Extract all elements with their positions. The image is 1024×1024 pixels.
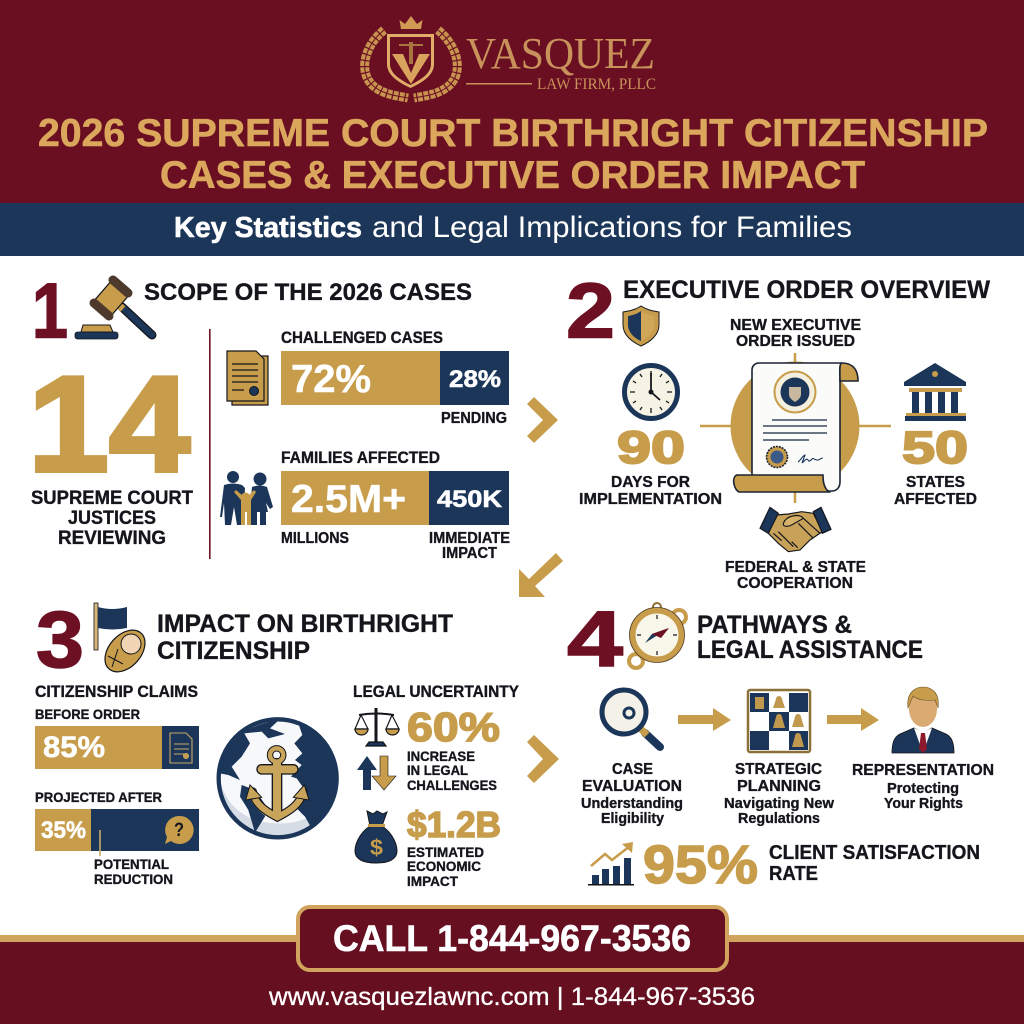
section heading	[157, 610, 453, 665]
title	[38, 112, 988, 197]
title: CASES & EXECUTIVE ORDER IMPACT	[160, 154, 865, 197]
step 3 label	[852, 762, 994, 812]
stat label: states affected: AFFECTED	[894, 491, 977, 508]
icon: scroll	[734, 363, 858, 492]
icon: shield	[623, 306, 659, 346]
footer band	[0, 907, 1024, 1024]
step 2 label	[724, 761, 835, 827]
bar: projected after	[35, 809, 199, 851]
section heading: EXECUTIVE ORDER OVERVIEW	[623, 276, 990, 304]
arrow: step 1 to step 2	[678, 708, 731, 731]
panel: scope of the 2026 cases	[28, 266, 510, 562]
label: immediate impact: IMPACT	[442, 545, 497, 562]
label: potential reduction	[94, 856, 173, 887]
call button: CALL 1-844-967-3536	[333, 918, 691, 959]
icon: gavel	[75, 279, 152, 339]
icon: handshake	[760, 507, 831, 552]
stat label: JUSTICES	[68, 508, 156, 529]
step 3 label: REPRESENTATION	[852, 762, 994, 779]
step 2 label: PLANNING	[737, 778, 821, 795]
step 1 label	[581, 761, 683, 827]
icon: scales	[355, 708, 399, 746]
section heading: LEGAL ASSISTANCE	[697, 636, 923, 664]
icon: attorney	[892, 687, 954, 753]
label: projected after: PROJECTED AFTER	[35, 790, 162, 805]
panel: pathways and legal assistance	[567, 594, 994, 895]
footer contact line: www.vasquezlawnc.com | 1-844-967-3536	[268, 983, 755, 1011]
subtitle band: and Legal Implications for Families	[372, 211, 852, 244]
bar: projected after: 35%	[41, 817, 86, 844]
label: client satisfaction rate	[769, 842, 980, 885]
icon: magnifying glass	[602, 690, 660, 747]
icon: document on bar	[170, 733, 192, 763]
stat label	[31, 488, 193, 549]
icon: crown	[400, 16, 422, 29]
label: client satisfaction rate: CLIENT SATISFACTION	[769, 842, 980, 864]
bar label: families affected: FAMILIES AFFECTED	[281, 449, 440, 467]
icon: flag	[94, 603, 127, 650]
section heading: IMPACT ON BIRTHRIGHT	[157, 610, 453, 638]
bar: challenged cases	[281, 351, 509, 405]
label: estimated economic impact: ECONOMIC	[407, 858, 481, 874]
label: increase in legal challenges: INCREASE	[407, 748, 475, 764]
step 2 label: Regulations	[738, 811, 820, 827]
cooperation label: COOPERATION	[737, 575, 853, 592]
label: potential reduction: POTENTIAL	[94, 856, 169, 872]
bar: families affected: 2.5M+	[291, 478, 406, 521]
logo subline: LAW FIRM, PLLC	[537, 76, 656, 93]
step 2 label: STRATEGIC	[735, 761, 822, 778]
central document with gold disc	[700, 353, 891, 503]
stat label: REVIEWING	[58, 528, 166, 549]
label: estimated economic impact	[407, 844, 484, 889]
order issued label	[730, 317, 861, 350]
label: client satisfaction rate: RATE	[769, 863, 818, 885]
step 1 label: CASE	[612, 761, 653, 778]
order issued label: NEW EXECUTIVE	[730, 317, 861, 334]
icon: chess board	[748, 690, 810, 752]
arrow: step 2 to step 3	[827, 708, 879, 731]
icon: money bag: $	[370, 835, 383, 860]
section number 3: 3	[36, 595, 84, 684]
bar label: challenged cases: CHALLENGED CASES	[281, 329, 443, 347]
bar: challenged cases: 28%	[449, 366, 501, 393]
label: estimated economic impact: ESTIMATED	[407, 844, 484, 860]
label: increase in legal challenges	[407, 748, 497, 793]
icon: money bag	[355, 811, 397, 863]
arrow: down-left to section 3	[519, 553, 563, 597]
icon: government building	[904, 363, 966, 421]
icon: swaddled baby	[97, 622, 153, 680]
logo rule	[466, 83, 532, 84]
icon: globe with anchor	[219, 719, 337, 837]
panel: executive order overview	[566, 266, 990, 592]
stat label: states affected: STATES	[906, 474, 965, 491]
subtitle band	[0, 203, 1024, 256]
call button	[298, 907, 727, 970]
panel: impact on birthright citizenship	[35, 595, 519, 889]
big stat 14: 14	[28, 348, 190, 500]
label: immediate impact	[429, 530, 510, 562]
stat label: days for implementation	[579, 474, 722, 508]
label: increase in legal challenges: IN LEGAL	[407, 762, 468, 778]
bar: challenged cases: 72%	[291, 358, 371, 401]
label: citizenship claims: CITIZENSHIP CLAIMS	[35, 683, 198, 701]
bar: families affected	[281, 471, 509, 525]
icon: clock	[624, 366, 678, 418]
label: before order: BEFORE ORDER	[35, 707, 140, 722]
label: potential reduction: REDUCTION	[94, 871, 173, 887]
step 2 label: Navigating New	[724, 796, 835, 812]
icon: question bubble	[165, 816, 194, 844]
order issued label: ORDER ISSUED	[736, 333, 855, 350]
leader line	[99, 830, 101, 856]
label: increase in legal challenges: CHALLENGES	[407, 777, 497, 793]
bar: before order	[35, 726, 199, 769]
header band	[0, 0, 1024, 204]
stat label: days for implementation: IMPLEMENTATION	[579, 491, 722, 508]
section heading: CITIZENSHIP	[157, 637, 310, 665]
subtitle band: Key Statistics	[174, 212, 362, 244]
stat: 95%: 95%	[643, 835, 758, 895]
stat: $1.2B: $1.2B	[407, 804, 501, 845]
section number 2: 2	[566, 266, 615, 354]
step 1 label: EVALUATION	[582, 778, 682, 795]
stat: 90: 90	[617, 422, 685, 473]
section number 4: 4	[567, 594, 623, 683]
label: estimated economic impact: IMPACT	[407, 873, 458, 889]
stat: 60%: 60%	[407, 704, 500, 750]
logo	[365, 16, 656, 98]
label: legal uncertainty: LEGAL UNCERTAINTY	[353, 683, 519, 701]
arrow: chevron to section 2	[527, 397, 558, 443]
label: immediate impact: IMMEDIATE	[429, 530, 510, 547]
stat label: SUPREME COURT	[31, 488, 193, 509]
icon: family	[220, 471, 273, 525]
logo wordmark: VASQUEZ	[466, 29, 655, 78]
stat label: days for implementation: DAYS FOR	[611, 474, 690, 491]
icon: document stack	[227, 351, 268, 405]
step 3 label: Protecting	[887, 781, 959, 797]
step 1 label: Eligibility	[601, 811, 664, 827]
bar: before order: 85%	[43, 731, 105, 764]
title: 2026 SUPREME COURT BIRTHRIGHT CITIZENSHIP	[38, 112, 988, 155]
icon: growth chart	[588, 842, 634, 886]
step 3 label: Your Rights	[884, 796, 963, 812]
label: pending: PENDING	[441, 410, 507, 427]
step 1 label: Understanding	[581, 796, 683, 812]
section heading: PATHWAYS &	[697, 611, 852, 639]
arrow: chevron to section 4	[527, 735, 559, 783]
icon: compass with gears	[629, 603, 686, 668]
cooperation label: FEDERAL & STATE	[725, 559, 866, 576]
icon: question bubble: ?	[174, 820, 184, 841]
cooperation label	[725, 559, 866, 592]
section heading: SCOPE OF THE 2026 CASES	[144, 279, 472, 306]
icon: up and down arrows	[357, 756, 396, 790]
bar: families affected: 450K	[437, 486, 503, 513]
label: millions: MILLIONS	[281, 530, 349, 547]
icon: laurel wreath	[365, 30, 457, 98]
section number 1: 1	[32, 266, 68, 354]
stat label: states affected	[894, 474, 977, 508]
stat: 50: 50	[902, 422, 968, 473]
icon: shield	[387, 34, 434, 88]
section heading	[697, 611, 923, 664]
